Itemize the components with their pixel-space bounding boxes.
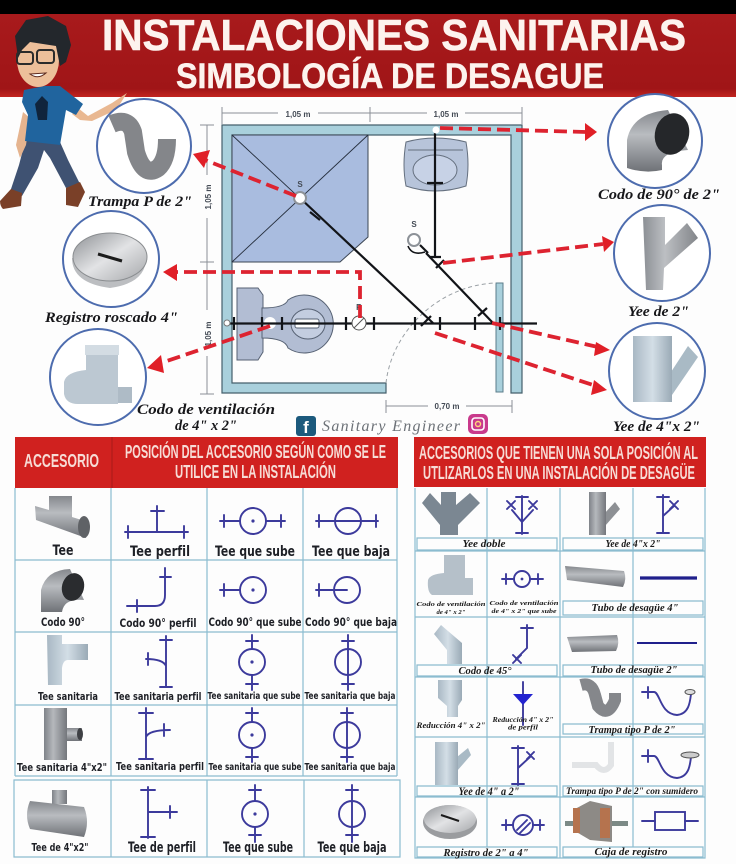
cell: ts4 sube: Tee sanitaria que sube bbox=[208, 762, 302, 773]
cell: codo perfil: Codo 90° perfil bbox=[120, 616, 196, 630]
pipe photo: tee sanitaria 4x2 bbox=[44, 708, 83, 760]
pointing arm bbox=[72, 93, 127, 121]
shower area bbox=[232, 135, 368, 262]
cell: codo sube: Codo 90° que sube bbox=[208, 615, 302, 629]
glasses bbox=[17, 52, 33, 64]
cell: tubo 2 bbox=[567, 635, 697, 676]
floor plan: S bbox=[411, 220, 417, 229]
cell: ts perfil: Tee sanitaria perfil bbox=[114, 691, 202, 703]
cell: tubo 4: Tubo de desagüe 4" bbox=[592, 602, 678, 614]
door bbox=[496, 283, 503, 392]
right table header bbox=[414, 437, 706, 487]
cell: codo baja: Codo 90° que baja bbox=[305, 615, 397, 629]
right table grid bbox=[415, 488, 705, 858]
circle: yee 2 bbox=[614, 205, 710, 320]
header: accesorio: ACCESORIO bbox=[24, 451, 99, 471]
row: tee bbox=[35, 496, 90, 559]
cell: codo baja bbox=[305, 577, 397, 629]
left table grid bbox=[14, 488, 400, 857]
face bbox=[17, 33, 59, 87]
drain pipes bbox=[228, 130, 537, 330]
circle: yee 4x2 bbox=[609, 323, 705, 435]
cell: yee 4x2: Yee de 4"x 2" bbox=[606, 539, 661, 550]
header: posicion: UTILICE EN LA INSTALACIÓN bbox=[175, 461, 336, 482]
left table header bbox=[15, 437, 398, 488]
cell: trampa con sumidero bbox=[566, 742, 699, 796]
social credits bbox=[296, 414, 488, 437]
cell: tee que sube bbox=[215, 508, 295, 560]
cell: reduccion: Reducción 4" x 2" bbox=[491, 716, 554, 724]
author name: Sanitary Engineer bbox=[322, 418, 461, 435]
name: Codo 90° bbox=[41, 615, 85, 629]
row: tee sanitaria 4x2 bbox=[17, 708, 107, 774]
cell: tee perfil 4x2: Tee de perfil bbox=[128, 840, 196, 856]
cell: trampa con sumidero: Trampa tipo P de 2" con sumidero bbox=[566, 786, 699, 796]
dimension: top left: 1,05 m bbox=[286, 110, 310, 119]
subtitle: SIMBOLOGÍA DE DESAGUE bbox=[176, 56, 604, 96]
name: Tee bbox=[52, 543, 74, 559]
cell: codo 45 bbox=[434, 625, 533, 677]
cell: ts4 baja: Tee sanitaria que baja bbox=[304, 762, 396, 773]
top black bar bbox=[0, 0, 736, 14]
pipe photo: tee sanitaria bbox=[47, 635, 88, 685]
floor plan bbox=[222, 125, 537, 393]
cell: ts sube bbox=[208, 635, 300, 702]
red dashed arrows bbox=[147, 123, 614, 395]
cell: tee baja 4x2: Tee que baja bbox=[318, 840, 386, 856]
title: INSTALACIONES SANITARIAS bbox=[102, 11, 686, 60]
shirt bbox=[22, 86, 83, 145]
floor plan: S bbox=[297, 180, 303, 189]
walls bbox=[222, 125, 522, 393]
dimension: top right: 1,05 m bbox=[434, 110, 458, 119]
cell: ts4 perfil: Tee sanitaria perfil bbox=[116, 761, 204, 773]
cell: trampa P bbox=[581, 684, 695, 736]
toilet bbox=[237, 288, 333, 360]
cell: tee que baja: Tee que baja bbox=[312, 544, 390, 560]
cell: reduccion: de perfil bbox=[508, 724, 538, 732]
cell: ts perfil bbox=[114, 636, 202, 703]
cell: ts4 perfil bbox=[116, 708, 204, 773]
cell: tubo 4 bbox=[565, 566, 697, 614]
row: codo 90 bbox=[41, 569, 87, 629]
cell: trampa P: Trampa tipo P de 2" bbox=[588, 725, 676, 736]
name: Tee sanitaria 4"x2" bbox=[17, 762, 107, 774]
circle: codo 90 bbox=[598, 94, 720, 203]
label: Yee de 2" bbox=[628, 304, 689, 320]
cell: ts baja: Tee sanitaria que baja bbox=[304, 691, 396, 702]
cell: ts sube: Tee sanitaria que sube bbox=[208, 691, 300, 702]
cell: tee que baja bbox=[312, 508, 390, 560]
floor drains bbox=[294, 192, 306, 204]
cell: yee doble bbox=[422, 492, 537, 550]
circle: codo de ventilacion: de 4" x 2" bbox=[175, 418, 237, 434]
label: Codo de ventilación bbox=[137, 402, 275, 418]
cell: tee sube 4x2 bbox=[223, 785, 293, 856]
legs bbox=[10, 138, 80, 196]
cell: codo de ventilacion: de 4" x 2" bbox=[436, 609, 466, 616]
dimension: door: 0,70 m bbox=[435, 402, 459, 411]
cell: reduccion bbox=[415, 680, 554, 732]
circle: registro roscado bbox=[44, 211, 178, 326]
boots bbox=[0, 189, 22, 209]
cell: ts4 sube bbox=[208, 708, 302, 773]
cell: ts baja bbox=[304, 635, 396, 702]
cell: codo de ventilacion: de 4" x 2" que sube bbox=[492, 608, 557, 615]
pipe photo: tee 4x2 bbox=[27, 790, 87, 837]
cell: yee 4 a 2 bbox=[435, 742, 534, 798]
cell: ts4 baja bbox=[304, 708, 396, 773]
hair bbox=[15, 16, 71, 66]
character: engineer pointing bbox=[0, 16, 127, 209]
circle: trampa P bbox=[88, 99, 192, 210]
label: Registro roscado 4" bbox=[44, 310, 178, 326]
name: Tee sanitaria bbox=[38, 691, 98, 703]
dimension: left lower: 1,05 m bbox=[204, 322, 213, 346]
cell: yee 4 a 2: Yee de 4" a 2" bbox=[458, 786, 520, 798]
cell: tubo 2: Tubo de desagüe 2" bbox=[590, 665, 678, 676]
cell: tee que sube: Tee que sube bbox=[215, 544, 295, 560]
pipe photo: codo bbox=[41, 569, 87, 612]
cell: codo sube bbox=[208, 577, 302, 629]
header banner bbox=[0, 11, 736, 97]
cell: codo perfil bbox=[120, 568, 196, 630]
name: Tee de 4"x2" bbox=[32, 841, 88, 854]
icon: facebook: f bbox=[303, 418, 309, 437]
circle: codo de ventilacion bbox=[50, 329, 275, 434]
cell: yee doble: Yee doble bbox=[462, 538, 506, 550]
icon: facebook bbox=[296, 416, 316, 437]
cell: registro: Registro de 2" a 4" bbox=[443, 847, 528, 859]
cell: codo de ventilacion bbox=[416, 555, 559, 616]
dimension lines bbox=[200, 107, 522, 413]
pipe photo: tee bbox=[35, 496, 90, 538]
header: posicion bbox=[125, 441, 386, 482]
cell: reduccion: Reducción 4" x 2" bbox=[415, 721, 486, 730]
label: Codo de 90° de 2" bbox=[598, 187, 720, 203]
cell: registro bbox=[423, 805, 544, 859]
cell: tee baja 4x2 bbox=[318, 785, 386, 856]
cell: caja de registro bbox=[565, 801, 698, 858]
cell: yee 4x2 bbox=[589, 492, 678, 550]
header: posicion: POSICIÓN DEL ACCESORIO SEGÚN COMO SE LE bbox=[125, 441, 386, 462]
dimension: left upper: 1,05 m bbox=[204, 185, 213, 209]
cell: caja de registro: Caja de registro bbox=[594, 846, 668, 858]
washbasin bbox=[404, 138, 468, 191]
cell: codo de ventilacion: Codo de ventilación bbox=[416, 601, 486, 608]
row: tee 4x2 bbox=[27, 790, 88, 854]
icon: instagram bbox=[468, 414, 488, 434]
cell: tee perfil: Tee perfil bbox=[130, 544, 190, 560]
cell: codo de ventilacion: Codo de ventilación bbox=[490, 600, 559, 607]
label: Trampa P de 2" bbox=[88, 194, 192, 210]
cell: codo 45: Codo de 45° bbox=[458, 666, 512, 677]
label: Yee de 4"x 2" bbox=[613, 419, 700, 435]
cell: tee perfil bbox=[125, 506, 190, 560]
cell: tee perfil 4x2 bbox=[128, 787, 196, 856]
left arm bbox=[16, 112, 30, 158]
row: tee sanitaria bbox=[38, 635, 98, 703]
floor plan: R bbox=[356, 303, 362, 312]
cell: tee sube 4x2: Tee que sube bbox=[223, 840, 293, 856]
